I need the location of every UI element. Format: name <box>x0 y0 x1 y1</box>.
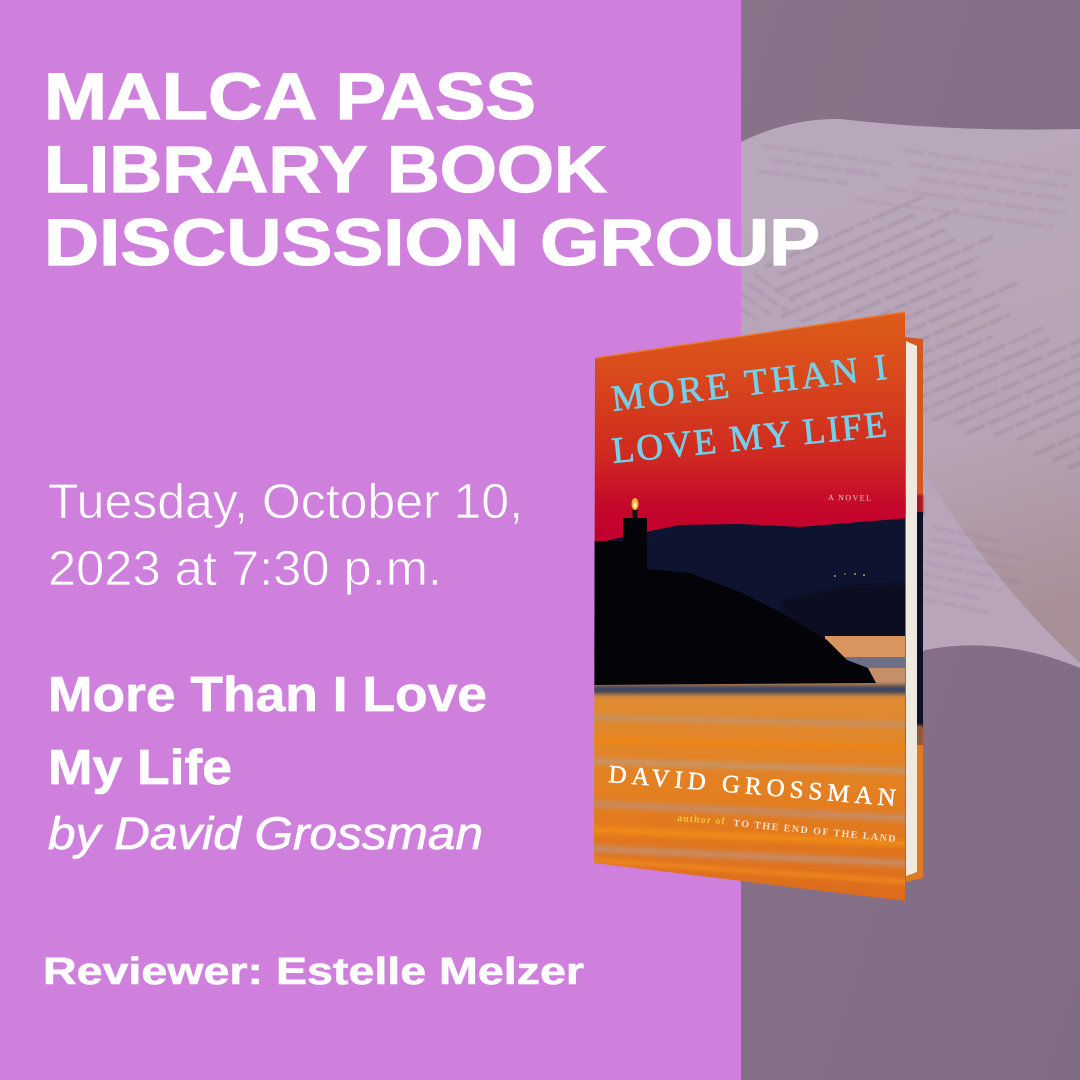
cover tagline: author of <box>677 813 726 827</box>
distant lights <box>834 573 865 577</box>
title: MALCA PASS <box>44 59 536 133</box>
cover title <box>609 347 889 472</box>
title: DISCUSSION GROUP <box>44 205 820 279</box>
water stripes <box>585 685 915 884</box>
far hills <box>590 518 910 660</box>
book back edge and pages <box>905 337 923 882</box>
title: LIBRARY BOOK <box>44 132 607 206</box>
headland silhouette <box>590 518 876 685</box>
cover highlight edge <box>595 312 905 358</box>
photo panel: open book <box>733 0 1080 1080</box>
front cover <box>585 305 915 908</box>
book title and author <box>48 668 487 859</box>
title <box>44 59 820 279</box>
evening water behind headland <box>590 683 910 908</box>
cover title: MORE THAN I <box>609 347 889 420</box>
cover tagline: TO THE END OF THE LAND <box>733 818 896 845</box>
reviewer: Reviewer: Estelle Melzer <box>43 951 584 993</box>
book title and author: My Life <box>48 741 232 795</box>
right page <box>741 119 1080 663</box>
cover tagline <box>677 813 896 845</box>
lower left page <box>741 262 1080 700</box>
date and time: 2023 at 7:30 p.m. <box>48 542 442 596</box>
date and time <box>48 475 523 596</box>
book cover image <box>585 305 923 908</box>
book title and author: by David Grossman <box>48 808 483 859</box>
lighthouse lamp <box>632 509 638 518</box>
cover author name: DAVID GROSSMAN <box>607 761 897 812</box>
cover title: LOVE MY LIFE <box>610 404 889 472</box>
date and time: Tuesday, October 10, <box>48 475 523 529</box>
book title and author: More Than I Love <box>48 668 487 722</box>
a novel label: A NOVEL <box>828 493 872 503</box>
